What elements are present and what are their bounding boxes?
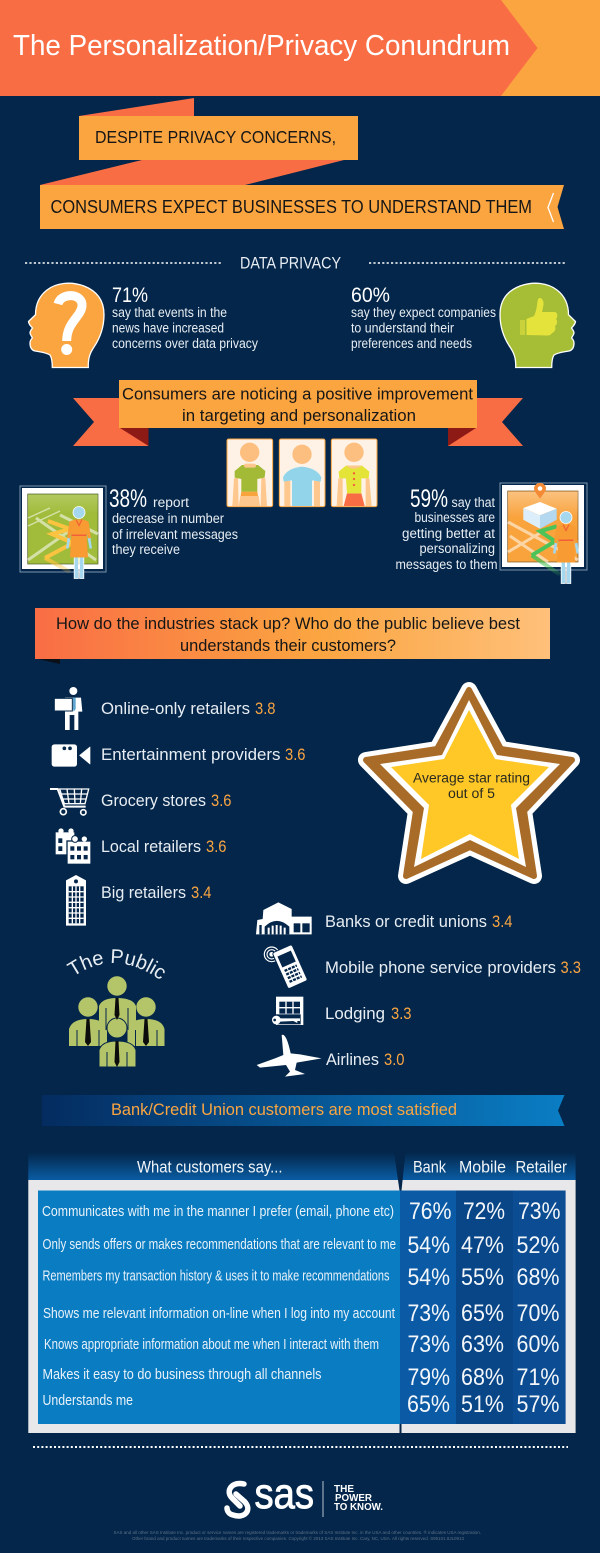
table percentages: 51% [461, 1391, 504, 1418]
icon: bank building [256, 902, 312, 934]
stat: 71 percent: 71% [112, 284, 148, 307]
icons: right industry list [256, 902, 322, 1077]
table percentages: 52% [516, 1232, 560, 1259]
table percentages: 79% [408, 1364, 450, 1391]
star: average rating [366, 690, 572, 876]
icon: airplane [257, 1035, 322, 1077]
banner: how do the industries stack up [35, 608, 550, 664]
stat: 71 percent: concerns over data privacy [112, 336, 258, 351]
icon: delivery person [54, 687, 82, 730]
list: left industry ratings: Online-only retailers [101, 699, 250, 718]
title: The Personalization/Privacy Conundrum [13, 30, 510, 62]
icon: orange map with cube, pin and woman [500, 483, 587, 584]
stat: 38 percent: they receive [112, 542, 180, 557]
stat: 71 percent: news have increased [112, 320, 224, 336]
ribbon: positive improvement [73, 380, 523, 446]
table percentages: 57% [516, 1391, 560, 1418]
logo tagline [334, 1484, 383, 1513]
icon: location pin [534, 483, 546, 498]
table percentages: 54% [408, 1264, 450, 1291]
icon: shopping cart [50, 789, 89, 815]
logo: SAS [227, 1470, 383, 1518]
icon: head with question mark [28, 283, 104, 368]
list: right industry ratings: 3.3 [391, 1004, 412, 1023]
icon: hotel and key [271, 997, 303, 1025]
table statements: Makes it easy to do business through all channels [42, 1367, 322, 1383]
star caption [413, 770, 530, 801]
table percentages: 55% [461, 1264, 504, 1291]
table percentages: 76% [409, 1198, 452, 1225]
table header row: Bank [413, 1158, 447, 1176]
icon: head with thumbs up [500, 283, 576, 368]
table percentages: 70% [516, 1300, 560, 1327]
ribbon text line 1: DESPITE PRIVACY CONCERNS, [95, 127, 336, 147]
table: what customers say [28, 1152, 576, 1433]
stat: 38 percent: decrease in number [112, 511, 224, 526]
list: left industry ratings: 3.6 [206, 837, 226, 856]
table statements: Communicates with me in the manner I prefer (email, phone etc) [42, 1204, 394, 1220]
stat: 59 percent [396, 485, 498, 572]
table header row: Mobile [459, 1158, 506, 1176]
list: right industry ratings: Mobile phone service providers [325, 958, 556, 977]
logo tagline: TO KNOW. [334, 1502, 383, 1513]
footer legal text: Other brand and product names are trademarks of their respective companies. Copyright © 2013 SAS Institute Inc. Cary, NC, USA. All rights reserved. S95101.8JL0913 [132, 1535, 464, 1541]
curved label: The Public [66, 949, 165, 979]
star caption: out of 5 [448, 786, 495, 801]
group: the public [66, 949, 165, 1067]
table percentages: 71% [516, 1364, 560, 1391]
table percentages: 65% [461, 1300, 504, 1327]
footer legal text [114, 1529, 481, 1541]
list: right industry ratings: Banks or credit unions [325, 912, 487, 931]
table header row: What customers say... [137, 1158, 282, 1176]
list: left industry ratings: Entertainment providers [101, 745, 280, 764]
list: left industry ratings: 3.8 [255, 699, 276, 718]
list: left industry ratings: 3.4 [191, 883, 212, 902]
list: right industry ratings [325, 912, 581, 1069]
icon: video camera [52, 744, 90, 767]
stat: 60 percent: say they expect companies [351, 305, 496, 320]
list: left industry ratings: Big retailers [101, 883, 186, 902]
stat: 71 percent: say that events in the [112, 305, 227, 320]
icon: local retail buildings [56, 828, 91, 864]
ribbon: bank customers most satisfied: Bank/Credit Union customers are most satisfied [111, 1100, 457, 1119]
table percentages: 65% [407, 1391, 450, 1418]
table header row: Retailer [516, 1158, 567, 1176]
stat: 59 percent: 59% [410, 485, 448, 513]
logo tagline: POWER [335, 1493, 373, 1504]
table percentages: 72% [463, 1198, 505, 1225]
table percentages: 63% [461, 1331, 504, 1358]
stat: 60 percent: preferences and needs [351, 336, 472, 351]
stat: 59 percent: messages to them [396, 557, 498, 572]
table percentages: 73% [408, 1300, 450, 1327]
stat: 59 percent: businesses are [414, 510, 495, 525]
banner text line 2: understands their customers? [180, 636, 396, 655]
icon: green map with woman [20, 486, 106, 578]
header banner [0, 0, 600, 96]
footer legal text: SAS and all other SAS Institute Inc. product or service names are registered trademarks or trademarks of SAS Institute Inc. in the USA and other countries. ® indicates USA registration. [114, 1529, 481, 1535]
list: left industry ratings: 3.6 [211, 791, 232, 810]
stat: 71 percent [112, 284, 258, 351]
table statements: Shows me relevant information on-line when I log into my account [43, 1306, 395, 1322]
table percentages: 73% [518, 1198, 560, 1225]
table statements: Remembers my transaction history & uses it to make recommendations [42, 1268, 390, 1284]
list: right industry ratings: 3.3 [560, 958, 581, 977]
stat: 59 percent: personalizing [420, 541, 495, 556]
stat: 60 percent: 60% [351, 284, 390, 307]
section heading: data privacy: DATA PRIVACY [240, 254, 341, 272]
table statements [42, 1204, 396, 1409]
table statements: Knows appropriate information about me when I interact with them [44, 1337, 379, 1353]
icons: left industry list [50, 687, 91, 926]
stat: 38 percent: report [153, 495, 189, 510]
stat: 38 percent [109, 485, 238, 557]
star caption: Average star rating [413, 770, 530, 786]
icon: tall department building [66, 875, 86, 926]
stat: 60 percent [351, 284, 496, 351]
list: left industry ratings [101, 699, 306, 902]
list: left industry ratings: Grocery stores [101, 791, 206, 810]
table header row [137, 1158, 567, 1176]
icon: mobile phone with signal [264, 944, 308, 989]
table percentages: 68% [516, 1264, 560, 1291]
card: person in green top [227, 439, 273, 507]
list: left industry ratings: 3.6 [285, 745, 306, 764]
ribbon: despite privacy concerns [40, 98, 564, 229]
table statements: Understands me [42, 1393, 133, 1409]
list: right industry ratings: 3.0 [384, 1050, 404, 1069]
ribbon heading line 1: Consumers are noticing a positive improvement [122, 384, 473, 404]
list: right industry ratings: Airlines [326, 1050, 379, 1069]
list: left industry ratings: Local retailers [101, 837, 201, 856]
table percentages [407, 1198, 560, 1418]
table percentages: 47% [461, 1232, 504, 1259]
stat: 38 percent: 38% [109, 485, 147, 513]
ribbon heading line 2: in targeting and personalization [182, 406, 416, 425]
table percentages: 54% [408, 1232, 450, 1259]
stat: 38 percent: of irrelevant messages [112, 527, 238, 542]
list: right industry ratings: Lodging [325, 1004, 385, 1023]
table percentages: 73% [408, 1331, 450, 1358]
stat: 59 percent: getting better at [402, 526, 495, 541]
table percentages: 68% [461, 1364, 504, 1391]
table statements: Only sends offers or makes recommendations that are relevant to me [42, 1237, 396, 1253]
list: right industry ratings: 3.4 [492, 912, 512, 931]
card: person in blue top [279, 439, 325, 507]
table percentages: 60% [516, 1331, 560, 1358]
icon: group of people [69, 976, 164, 1067]
card: person in yellow top [331, 439, 377, 507]
ribbon text line 2: CONSUMERS EXPECT BUSINESSES TO UNDERSTAND THEM [50, 197, 532, 217]
logo symbol [227, 1483, 248, 1516]
stat: 60 percent: to understand their [351, 320, 454, 336]
stat: 59 percent: say that [452, 495, 495, 510]
logo wordmark: sas [254, 1470, 314, 1518]
people cards [227, 439, 377, 507]
banner text line 1: How do the industries stack up? Who do the public believe best [56, 614, 520, 633]
logo tagline: THE [334, 1484, 354, 1495]
ribbon: bank customers most satisfied [42, 1095, 564, 1126]
